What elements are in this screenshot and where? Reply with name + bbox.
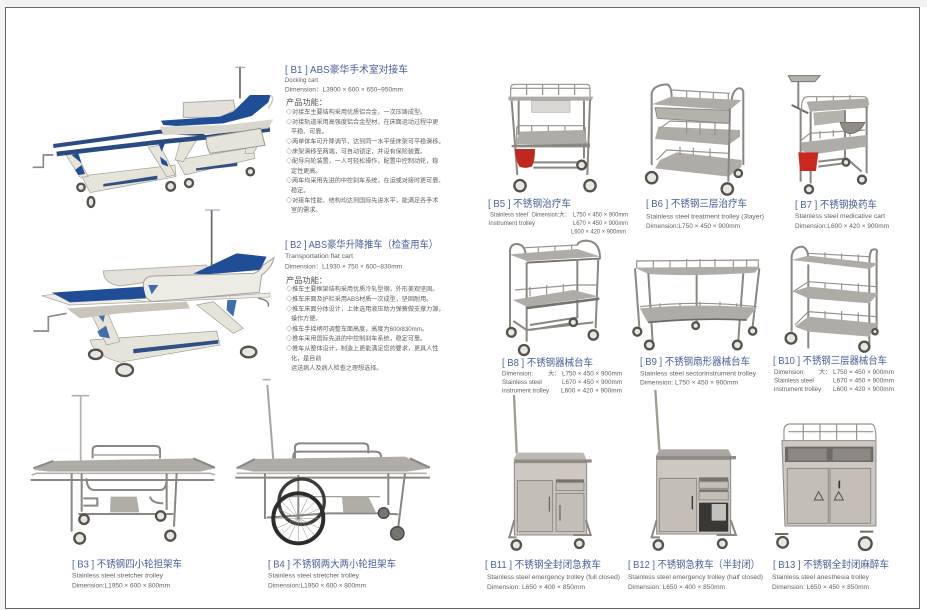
- illustration: medicative cart with tray, bowl and bucket: [788, 76, 868, 193]
- heading: B12: [ B12 ] 不锈钢急救车（半封闭）: [628, 558, 760, 571]
- heading: B10: [ B10 ] 不锈钢三层器械台车: [773, 354, 887, 367]
- illustration: closed emergency cabinet: [509, 395, 592, 550]
- spec text: B11: [487, 574, 620, 591]
- spec text: B1: 定性更高。: [291, 167, 321, 175]
- illustration: half-open emergency cabinet: [652, 390, 736, 550]
- spec text: B10: 大：: [819, 368, 831, 376]
- product B12: half-closed emergency trolley: [628, 390, 763, 591]
- spec text: B1: ◇床架滑移至两端，可自动锁定，并设有保险装置。: [286, 148, 426, 156]
- spec text: B6: Stainless steel treatment trolley (3layer): [646, 214, 764, 220]
- heading: B6: [ B6 ] 不锈钢三层治疗车: [646, 197, 747, 210]
- heading: B13: [ B13 ] 不锈钢全封闭麻醉车: [773, 558, 889, 571]
- spec text: B8: 大：: [548, 370, 560, 378]
- spec text: B2: 运送病人及病人检查之理想选择。: [291, 364, 382, 372]
- spec text: B3: [72, 572, 170, 590]
- spec text: B1: 稳定。: [291, 186, 309, 194]
- product B6: three-layer treatment trolley: [646, 84, 764, 230]
- spec text: B11: Stainless steel emergency trolley (full closed): [487, 574, 620, 581]
- spec text: B3: Dimension:L1950 × 600 × 800mm: [72, 582, 170, 590]
- spec text: B5: Stainless steel: [490, 212, 528, 218]
- spec text: B7: [795, 213, 889, 230]
- spec text: B1: ◇对接车性能、结构均达到国际先进水平，能满足各手术: [286, 196, 438, 204]
- spec text: B5: L670 × 450 × 900mm: [573, 220, 628, 227]
- product B4: stretcher with two large wheels: [235, 380, 430, 590]
- spec text: B10: Dimension:: [774, 369, 805, 376]
- spec text: B9: [640, 370, 757, 386]
- spec text: B8: L600 × 420 × 900mm: [561, 388, 622, 394]
- illustration: curved trolley: [633, 259, 760, 349]
- spec text: B5: Dimension:大：: [532, 210, 570, 218]
- spec text: B5: [489, 210, 628, 236]
- spec text: B2: 化，是目前: [291, 354, 321, 362]
- spec text: B1: 产品功能：: [286, 97, 327, 107]
- spec text: B3: Stainless steel stretcher trolley: [72, 572, 164, 580]
- spec text: B13: Stainless steel anesthesia trolley: [772, 574, 870, 581]
- heading: B7: [ B7 ] 不锈钢换药车: [795, 198, 877, 211]
- spec text: B4: Dimension:L1950 × 600 × 800mm: [268, 582, 366, 590]
- spec text: B7: Stainless steel medicative cart: [795, 213, 885, 220]
- heading: B5: [ B5 ] 不锈钢治疗车: [488, 197, 571, 210]
- spec text: B8: Stainless steel: [502, 379, 542, 386]
- illustration: docking cart: [33, 67, 273, 207]
- spec text: B1: 室的需求。: [291, 206, 321, 214]
- illustration: stretcher trolley: [31, 396, 215, 544]
- product B10: three-layer instrument trolley: [773, 247, 894, 393]
- illustration: three-layer cart: [646, 84, 743, 195]
- spec text: B2: ◇推车采用国际先进的中控制刹车系统，稳定可靠。: [286, 334, 426, 342]
- product B7: medicative cart: [788, 76, 889, 230]
- spec text: B8: L670 × 450 × 900mm: [562, 379, 622, 386]
- illustration: flat cart: [33, 210, 274, 376]
- spec text: B4: Stainless steel stretcher trolley: [268, 572, 360, 580]
- spec text: B1: ◇对接轨道采用高强度铝合金型材，在床面运动过程中更: [286, 118, 438, 126]
- spec text: B1: ◇两单体车可升降调节，达到同一水平使床架可平稳滑移。: [286, 138, 444, 146]
- spec text: B1: ◇两车均采用先进的中控刹车系统，在运或对接时更可靠、: [286, 176, 444, 184]
- heading: B4: [ B4 ] 不锈钢两大两小轮担架车: [268, 558, 396, 570]
- spec text: B1: 平稳、可靠。: [291, 128, 328, 136]
- spec text: B6: Dimension:L750 × 450 × 900mm: [646, 223, 740, 230]
- spec text: B1: Docking cart: [285, 77, 318, 84]
- spec text: B10: L670 × 450 × 900mm: [833, 378, 894, 384]
- illustration: anesthesia cabinet: [775, 424, 876, 550]
- product B13: anesthesia trolley: [772, 424, 889, 591]
- spec text: B12: [628, 574, 763, 591]
- spec text: B10: Stainless steel: [774, 378, 814, 384]
- spec text: B8: L750 × 450 × 900mm: [562, 370, 622, 378]
- spec text: B10: instrument trolley: [774, 386, 822, 393]
- spec text: B2: Transportation flat cart: [285, 253, 353, 260]
- spec text: B2: Dimension：L1930 × 750 × 600~830mm: [285, 264, 402, 270]
- illustration: three-shelf trolley: [786, 247, 878, 352]
- spec text: B1: ◇配导向轮装置，一人可轻松操作，配置中控制动轮，稳: [286, 157, 438, 165]
- product B5: stainless steel instrument trolley: [488, 84, 628, 236]
- heading: B2: [ B2 ] ABS豪华升降推车（检查用车）: [285, 238, 438, 251]
- spec text: B1: ◇对接车主要结构采用优质铝合金，一次压铸成型。: [286, 108, 426, 116]
- spec text: B9: Stainless steel sectorinstrument trolley: [640, 370, 757, 378]
- product B11: fully closed emergency trolley: [485, 395, 620, 591]
- spec text: B8: instrument trolley: [502, 388, 550, 394]
- spec text: B2: ◇推车床面分体设计，上体选用液压助力弹簧做支撑力源，: [286, 305, 444, 313]
- product B3: stretcher with four small wheels: [31, 396, 215, 590]
- product B9: sector instrument trolley: [633, 259, 760, 386]
- spec text: B1: [285, 77, 444, 214]
- heading: B9: [ B9 ] 不锈钢扇形器械台车: [640, 355, 750, 368]
- spec text: B8: [502, 370, 622, 394]
- spec text: B7: Dimension:L600 × 420 × 900mm: [795, 223, 889, 230]
- spec text: B5: L750 × 450 × 900mm: [573, 212, 628, 218]
- product B2: transportation flat cart: [33, 210, 444, 376]
- spec text: B5: instrument trolley: [489, 220, 536, 227]
- spec text: B4: [268, 572, 366, 590]
- spec text: B13: [772, 574, 870, 591]
- spec text: B5: L600 × 420 × 900mm: [571, 228, 626, 236]
- spec text: B10: [774, 368, 894, 393]
- illustration: two-shelf instrument trolley: [507, 241, 601, 355]
- spec text: B1: Dimension：L3900 × 600 × 650~950mm: [285, 86, 403, 94]
- spec text: B2: ◇推车从整体设计，制造上更能满足您的要求，更具人性: [286, 344, 438, 352]
- spec text: B6: [646, 214, 764, 230]
- product B1: docking cart: [33, 63, 444, 214]
- spec text: B2: ◇推车主要框架结构采用优质冷轧型钢，外形美观坚固。: [286, 285, 438, 293]
- spec text: B2: ◇推车床面及护栏采用ABS材质一次成型，坚固耐用。: [286, 295, 432, 303]
- spec text: B2: 操作方便。: [291, 314, 321, 322]
- spec text: B2: ◇推车手摇柄可调整车面高度，高度为600/830mm。: [286, 325, 428, 333]
- product B8: instrument trolley: [502, 241, 622, 394]
- spec text: B12: Dimension: L650 × 400 × 850mm: [628, 584, 725, 591]
- heading: B3: [ B3 ] 不锈钢四小轮担架车: [72, 558, 182, 570]
- illustration: treatment cart with red bucket: [508, 84, 596, 191]
- spec text: B10: L600 × 420 × 900mm: [833, 386, 894, 393]
- spec text: B12: Stainless steel emergency trolley (half closed): [628, 574, 763, 581]
- spec text: B9: Dimension: L750 × 450 × 900mm: [640, 380, 738, 386]
- spec text: B2: [285, 253, 444, 372]
- spec text: B13: Dimension: L650 × 450 × 850mm: [772, 584, 869, 591]
- spec text: B2: 产品功能：: [286, 275, 327, 285]
- spec text: B10: L750 × 450 × 900mm: [833, 369, 894, 376]
- heading: B11: [ B11 ] 不锈钢全封闭急救车: [485, 558, 601, 571]
- spec text: B8: Dimension:: [502, 370, 533, 378]
- spec text: B11: Dimension: L650 × 400 × 850mm: [487, 584, 585, 591]
- illustration: large-wheel stretcher: [235, 380, 430, 543]
- heading: B1: [ B1 ] ABS豪华手术室对接车: [285, 63, 408, 76]
- heading: B8: [ B8 ] 不锈钢器械台车: [502, 356, 593, 369]
